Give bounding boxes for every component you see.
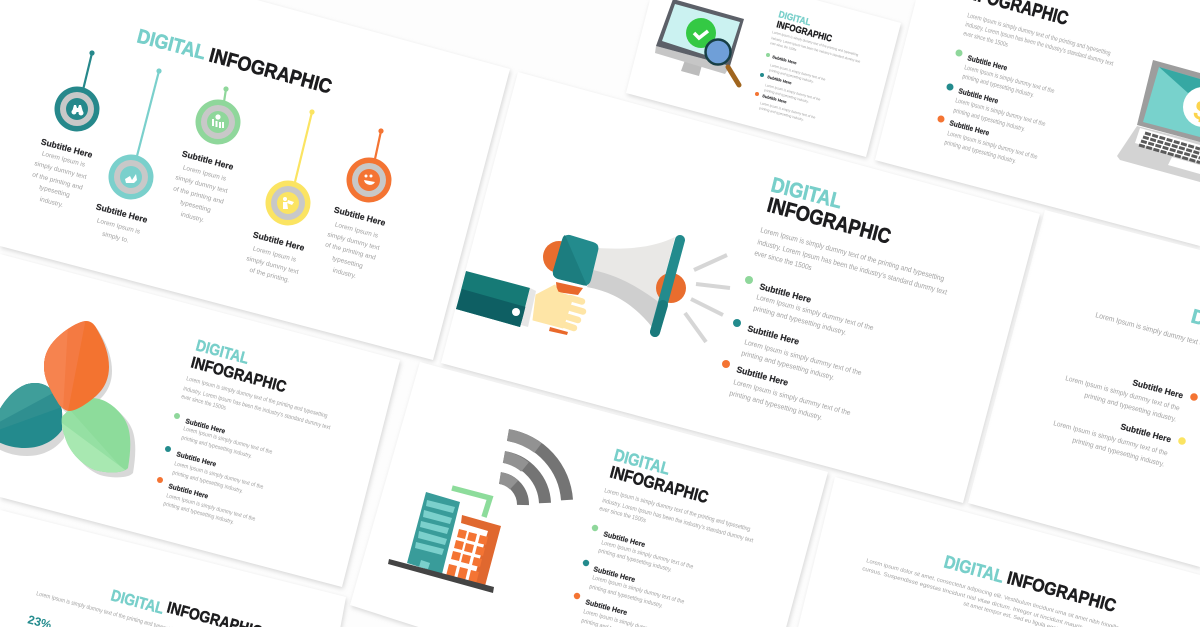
- handle box: [553, 235, 598, 286]
- chart: three-leaf diagram: [0, 318, 135, 477]
- list items: Subtitle Here: [592, 564, 636, 584]
- list items: printing and typesetting industry.: [759, 106, 804, 122]
- list item orange: printing and typesetting industry.: [1083, 392, 1177, 424]
- list items: printing and typesetting industry.: [597, 548, 673, 574]
- title: digital infographic: [942, 552, 1118, 616]
- list items: Subtitle Here: [767, 74, 793, 86]
- column text 2: simply to.: [101, 231, 130, 245]
- column text 1: simply dummy text: [33, 160, 87, 181]
- list item yellow: Lorem Ipsum is simply dummy text of the: [1052, 420, 1168, 457]
- hand: [533, 285, 583, 328]
- title: digital infographic: DIGITAL: [777, 9, 812, 28]
- intro text: ever since the 1500s: [598, 505, 647, 524]
- intro text: Lorem Ipsum is simply dummy text of the printing and typesetting: [603, 487, 752, 533]
- title: digital infographic: [109, 587, 264, 627]
- intro text: ever since the 1500s: [180, 394, 226, 412]
- list items: Lorem Ipsum is simply dummy text of the: [765, 83, 821, 102]
- list items: Lorem Ipsum is simply dummy text of the: [591, 575, 685, 606]
- title: digital infographic: DIGITAL: [135, 26, 208, 64]
- panel: right slide: [968, 210, 1200, 567]
- list items: [938, 50, 1055, 165]
- leaf shadows: [0, 325, 135, 477]
- list item yellow: Subtitle Here: [1119, 421, 1173, 444]
- list items: printing and typesetting industry.: [961, 73, 1035, 99]
- intro text: Lorem Ipsum is simply dummy text of the printing and typesetting: [966, 12, 1112, 57]
- icon: buildings: [388, 488, 501, 593]
- list items: Lorem Ipsum is simply dummy text of the: [173, 461, 264, 491]
- column text 1: typesetting: [38, 184, 71, 199]
- list items: [574, 525, 694, 627]
- sound lines: [685, 255, 730, 342]
- list item 2: printing and typesetting industry.: [740, 348, 836, 382]
- list item 1: printing and typesetting industry.: [752, 303, 848, 337]
- panel: bottom-right slide: [795, 477, 1200, 627]
- list items: printing and typesetting industry.: [180, 435, 253, 460]
- title: digital infographic: [775, 9, 833, 45]
- list item yellow: printing and typesetting industry.: [1071, 437, 1165, 469]
- column text 5: of the printing and: [324, 241, 377, 262]
- list items: Subtitle Here: [175, 451, 217, 469]
- title: digital infographic: INFOGRAPHIC: [1005, 568, 1118, 616]
- list items: printing and typesetting industry.: [943, 139, 1017, 165]
- intro text: industry. Lorem Ipsum has been the industry's standard dummy text: [771, 36, 861, 64]
- title: digital infographic: DIGITAL: [942, 552, 1006, 587]
- intro text: Lorem Ipsum is simply dummy text of the printing and typesetting: [772, 30, 859, 57]
- panel: five-step pin slide: [0, 0, 510, 360]
- intro text: Lorem Ipsum is simply dummy text of the printing and typesetting: [759, 225, 945, 283]
- column text 5: typesetting: [331, 255, 364, 270]
- list item orange: Subtitle Here: [1131, 377, 1185, 400]
- column text 1: Lorem Ipsum is: [41, 150, 86, 169]
- column text 3: Lorem Ipsum is: [182, 164, 227, 183]
- horn front: [655, 240, 686, 332]
- list items: printing and typesetting industry.: [171, 470, 244, 495]
- title: digital infographic: INFOGRAPHIC: [765, 194, 893, 249]
- list items: Subtitle Here: [957, 86, 999, 106]
- list items: Subtitle Here: [948, 118, 990, 138]
- title: digital infographic: DIGITAL: [612, 446, 672, 479]
- column text 5: [324, 204, 387, 280]
- panel: building slide: [350, 362, 828, 627]
- column text 2: [95, 201, 149, 245]
- title: digital infographic: INFOGRAPHIC: [608, 463, 710, 507]
- list items: [755, 53, 826, 122]
- megaphone back and handle: [543, 241, 583, 335]
- intro text: ever since the 1500s: [753, 248, 813, 272]
- icon: wifi signal: [500, 435, 567, 505]
- title: digital infographic: DIGITAL: [194, 337, 251, 368]
- list items: Lorem Ipsum is simply dummy text of the: [760, 101, 816, 120]
- leaf: orange: [44, 321, 109, 411]
- title: digital infographic: DIGITAL: [769, 174, 844, 213]
- title: digital infographic: INFOGRAPHIC: [775, 19, 833, 45]
- column text 2: Subtitle Here: [95, 201, 149, 225]
- list items: Subtitle Here: [762, 93, 788, 105]
- column text 3: Subtitle Here: [181, 148, 235, 172]
- list items: Subtitle Here: [184, 418, 226, 436]
- leaf: teal: [0, 383, 62, 448]
- list item 3: Subtitle Here: [735, 364, 789, 388]
- pin marker 3: [196, 86, 240, 144]
- column text 5: Lorem Ipsum is: [334, 221, 379, 240]
- title: digital infographic: [135, 26, 334, 98]
- list items: Subtitle Here: [772, 54, 798, 66]
- pin marker 2: [108, 68, 162, 200]
- list item 2: Lorem Ipsum is simply dummy text of the: [743, 337, 863, 377]
- list item 3: [722, 360, 852, 422]
- intro text: industry. Lorem Ipsum has been the industry's standard dummy text: [756, 237, 949, 297]
- intro text: industry. Lorem Ipsum has been the industry's standard dummy text: [182, 386, 331, 431]
- title: digital infographic: DIGITAL: [109, 587, 166, 618]
- column text 3: industry.: [180, 211, 205, 224]
- intro text: ever since the 1500s: [770, 41, 797, 52]
- column text 4: Lorem Ipsum is: [252, 245, 297, 264]
- list items: printing and typesetting industry.: [952, 107, 1026, 133]
- panel: bottom-left slide: [0, 510, 346, 627]
- column text 5: simply dummy text: [326, 231, 380, 252]
- leaf: green: [62, 398, 130, 472]
- column text 4: simply dummy text: [245, 255, 299, 276]
- intro text: industry. Lorem Ipsum has been the industry's standard dummy text: [964, 21, 1114, 68]
- column text 2: Lorem Ipsum is: [96, 217, 141, 236]
- column text 1: industry.: [39, 196, 64, 209]
- list items: printing and typesetting industry.: [764, 88, 809, 104]
- list item 2: Subtitle Here: [746, 323, 800, 347]
- list items: Subtitle Here: [602, 529, 646, 549]
- list items: [157, 413, 273, 526]
- intro text: Lorem Ipsum is simply dummy text of the printing and typesetting: [185, 376, 328, 420]
- title: digital infographic: [765, 174, 893, 249]
- list items: Lorem Ipsum is simply dummy text of the: [946, 130, 1038, 161]
- sleeve: [456, 271, 536, 327]
- list items: Lorem Ipsum is simply dummy text of the: [963, 64, 1055, 95]
- column text 3: simply dummy text: [174, 174, 228, 195]
- list items: Subtitle Here: [966, 53, 1008, 73]
- column text 1: [31, 136, 94, 209]
- list item 3: Lorem Ipsum is simply dummy text of the: [732, 377, 852, 417]
- panel: top monitor slide: [626, 0, 901, 157]
- column text 4: of the printing.: [249, 267, 290, 284]
- title: digital infographic: INFOGRAPHIC: [189, 354, 288, 396]
- list items: Lorem Ipsum is simply dummy text of the: [182, 426, 273, 456]
- icon: megaphone with hand: [456, 235, 730, 342]
- list item orange: Lorem Ipsum is simply dummy text of the: [1064, 375, 1180, 412]
- panel: leaves slide: [0, 321, 402, 590]
- icon: laptop: [1117, 60, 1200, 182]
- column text 4: [245, 229, 306, 284]
- pin marker 1: [54, 50, 100, 132]
- panel: top-right laptop slide: [875, 0, 1200, 246]
- column text 4: Subtitle Here: [252, 229, 306, 253]
- list item 2: [733, 319, 863, 382]
- column text 3: [172, 148, 235, 224]
- list items: Lorem Ipsum is simply dummy text of the: [600, 540, 694, 571]
- title: digital infographic: [189, 337, 288, 396]
- column text 5: Subtitle Here: [333, 204, 387, 228]
- pin marker 4: [266, 109, 315, 226]
- list items: Lorem Ipsum is simply dummy text of the: [954, 97, 1046, 128]
- list items: Subtitle Here: [584, 597, 628, 617]
- title: digital infographic: [608, 446, 710, 507]
- horn: [587, 237, 675, 327]
- list items: Lorem Ipsum is simply dummy text of the: [770, 63, 826, 82]
- intro text: industry. Lorem Ipsum has been the industry's standard dummy text: [601, 497, 754, 544]
- list items: Subtitle Here: [167, 483, 209, 501]
- list items: printing and typesetting industry.: [162, 501, 235, 526]
- intro text: ever since the 1500s: [962, 30, 1009, 49]
- panel: megaphone slide: [441, 72, 1040, 503]
- column text 5: industry.: [332, 267, 357, 280]
- list items: printing and typesetting industry.: [588, 584, 664, 610]
- list items: Lorem Ipsum is simply dummy text of the: [165, 493, 256, 523]
- column text 1: Subtitle Here: [40, 136, 94, 160]
- list item 1: [745, 276, 875, 337]
- pin marker 5: [346, 128, 392, 202]
- title: digital infographic: INFOGRAPHIC: [207, 45, 334, 98]
- column text 3: typesetting: [179, 199, 212, 214]
- list items: printing and typesetting industry.: [769, 68, 814, 84]
- icon: monitor with magnifier: [655, 0, 744, 85]
- column text 1: of the printing and: [31, 171, 84, 192]
- list item 1: Subtitle Here: [758, 281, 812, 305]
- list item 3: printing and typesetting industry.: [728, 388, 824, 422]
- list item 1: Lorem Ipsum is simply dummy text of the: [755, 292, 875, 332]
- column text 3: of the printing and: [172, 185, 225, 206]
